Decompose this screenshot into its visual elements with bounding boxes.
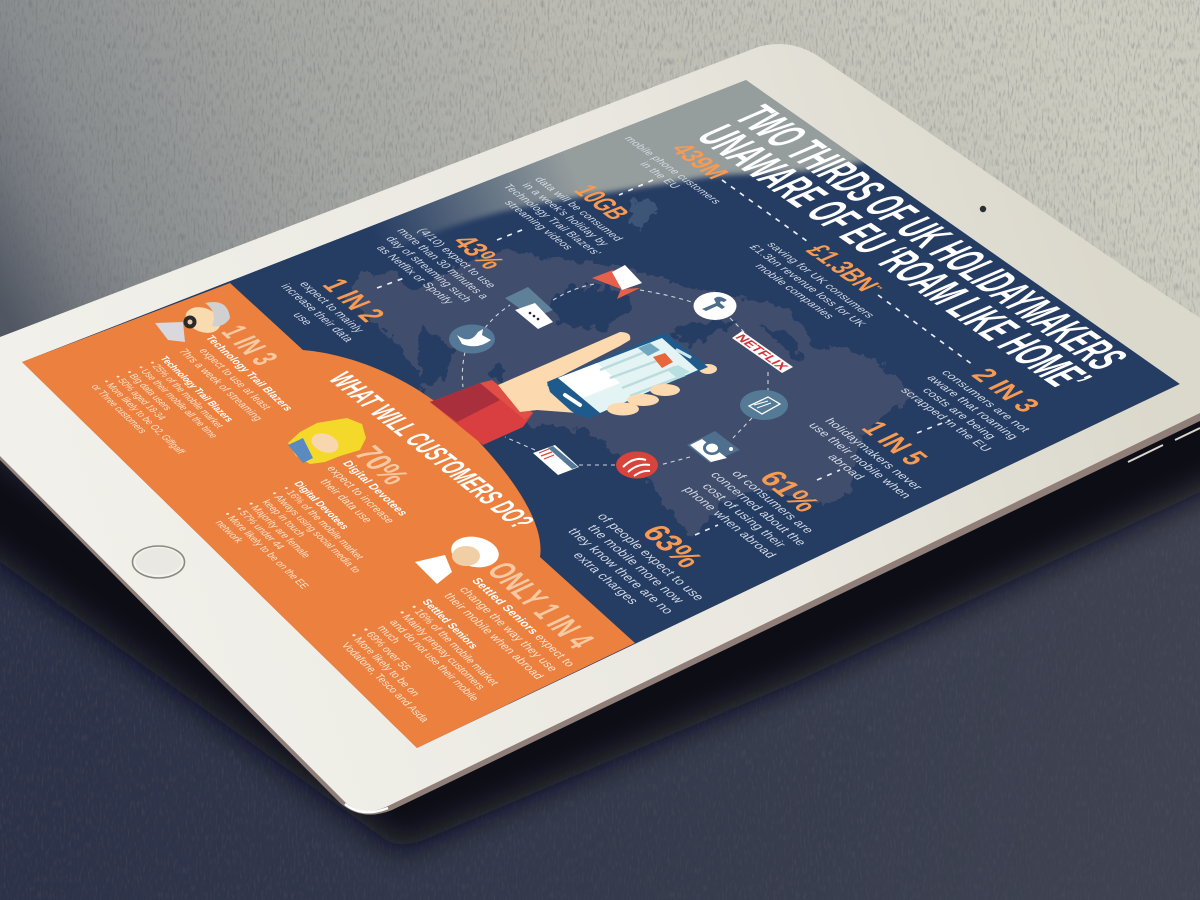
segment: settled seniors: Settled Seniors expect to <box>469 576 577 669</box>
stat: 1 in 2: expect to mainly <box>296 280 366 335</box>
stat: 10GB: Technology Trail Blazers' <box>500 183 604 257</box>
segment: settled seniors: their mobile when abroad <box>441 592 546 681</box>
segment: technology trail blazers: • More likely to be O2, Giffgaff <box>100 378 188 455</box>
dashed ring around the hand <box>462 284 768 465</box>
stat: 1 in 2: 1 IN 2 <box>314 275 392 326</box>
stat: 1 in 5 <box>792 414 934 507</box>
fingers <box>607 384 680 416</box>
segment: digital devotees: keep in touch <box>259 499 308 539</box>
hand holding phone <box>430 332 717 445</box>
stat: £1.3BN: £1.3BN <box>800 241 903 307</box>
stat: 63%: extra charges <box>570 550 643 606</box>
stat: 1 in 5: abroad <box>824 452 868 482</box>
stat: 61% <box>678 463 828 561</box>
segment: technology trail blazers: 1 IN 3 <box>213 321 285 370</box>
segment: settled seniors: much <box>374 624 402 645</box>
stat: 1 in 2: use <box>290 311 315 327</box>
stat: 10GB: 10GB <box>567 181 636 223</box>
segment: technology trail blazers <box>89 321 295 460</box>
map of Europe and Asia <box>345 198 915 560</box>
icon: twitter <box>449 324 495 354</box>
segment: settled seniors: • 16% of the mobile market <box>407 604 500 687</box>
stat: 63%: the mobile more now <box>584 523 689 606</box>
stat: 10GB: data will be consumed <box>531 176 625 243</box>
segment: digital devotees: Digital Devotees <box>339 459 410 518</box>
icon: instagram <box>687 431 740 463</box>
stat: 439M: 439M <box>664 140 736 182</box>
segment: technology trail blazers: • 50% aged 18-34 <box>112 374 168 421</box>
stat: 43%: 43% <box>445 231 512 273</box>
stat: 61%: cost of using their <box>699 482 789 550</box>
segment: settled seniors: and do not use their mobile <box>386 619 481 703</box>
segment: digital devotees: Digital Devotees <box>291 480 351 531</box>
segment: technology trail blazers: • Big data users <box>123 369 174 412</box>
dashed connectors between statistics <box>377 180 973 535</box>
segment: technology trail blazers: • 25% of the mobile market <box>146 360 226 430</box>
stat: 63%: of people expect to use <box>594 511 709 603</box>
stat: 2 in 3: scrapped in the EU <box>897 386 994 454</box>
avatar: digital devotee <box>288 418 366 464</box>
stat: 61%: concerned about the <box>707 470 810 548</box>
panel: navy screen <box>22 70 1180 748</box>
stat: £1.3BN: saving for UK consumers <box>764 241 877 320</box>
stat: £1.3BN: ** <box>872 284 886 291</box>
segment: technology trail blazers: 7hrs a week of streaming <box>176 348 265 423</box>
stat: 2 in 3: consumers are not <box>938 368 1033 434</box>
stat: 63% <box>549 511 712 624</box>
segment: settled seniors <box>334 557 603 726</box>
segment: digital devotees: • Majority are female <box>244 500 313 560</box>
stat: 2 in 3: aware that roaming <box>924 374 1021 441</box>
segment: digital devotees: • 16% of the mobile market <box>279 485 366 561</box>
stat: 439M: mobile phone customers <box>621 135 724 206</box>
stat: 10GB <box>487 172 636 262</box>
segment: digital devotees: • More likely to be on the EE <box>220 511 311 591</box>
icon: netflix: NETFLIX <box>732 333 792 372</box>
avatar: settled senior <box>415 533 501 584</box>
segment: digital devotees: 70% <box>346 441 417 489</box>
stat: £1.3BN: £1.3bn revenue loss for UK <box>746 243 869 329</box>
stat: 43%: more than 30 minutes a <box>393 227 492 301</box>
segment: digital devotees: • Always using social media to <box>267 490 363 575</box>
title <box>685 99 1140 396</box>
stat: 10GB: in a week's holiday by <box>519 182 612 248</box>
icon: spotify <box>616 452 658 478</box>
stat: 43%: as Netflix or Spotify <box>373 244 456 306</box>
avatar: technology trail blazer <box>155 302 230 342</box>
stat: 1 in 2: increase their data <box>277 282 356 344</box>
stat: 43%: day of streaming such <box>382 235 474 304</box>
stat: 1 in 5: 1 IN 5 <box>854 417 934 470</box>
stat: £1.3BN <box>733 238 891 334</box>
segment: settled seniors: • 69% over 55 <box>358 626 412 673</box>
stat: 2 in 3: costs are being <box>919 386 999 441</box>
segment: settled seniors: • More likely to be on <box>346 632 422 698</box>
stat: 43%: (4/10) expect to use <box>414 227 499 290</box>
stat: 10GB: streaming videos <box>501 199 576 251</box>
icon: side buttons <box>1128 428 1200 462</box>
tablet shadow <box>0 320 1200 850</box>
stat: £1.3BN: mobile companies <box>752 263 837 321</box>
segment: digital devotees: expect to increase <box>324 464 397 525</box>
panel: orange customers section <box>22 283 635 748</box>
segment: settled seniors: ONLY 1 IN 4 <box>479 557 603 653</box>
stat: 2 in 3: 2 IN 3 <box>964 364 1047 416</box>
segment: digital devotees: their data use <box>317 478 375 525</box>
icon: camera <box>980 206 986 212</box>
stat: 61%: 61% <box>751 466 828 516</box>
phone <box>547 333 708 418</box>
segment: technology trail blazers: • Use their mobile all the time <box>135 364 220 439</box>
hand <box>498 332 630 413</box>
icon: bank card <box>533 445 579 475</box>
segment: digital devotees: network <box>212 519 245 545</box>
stat: 439M: in the EU <box>637 160 683 190</box>
segment: settled seniors: Settled Seniors <box>419 598 480 651</box>
segment: settled seniors: change the way they use <box>456 585 560 674</box>
icon: document <box>740 390 788 420</box>
segment: technology trail blazers: Technology Trail Blazers <box>202 334 295 413</box>
stat: 1 in 5: holidaymakers never <box>822 416 926 492</box>
segment: digital devotees: • 57% under 44 <box>232 506 287 552</box>
stat: 2 in 3 <box>897 364 1047 454</box>
icon: chat <box>505 287 553 329</box>
heading: what will customers do: WHAT WILL CUSTOMERS DO? <box>321 368 541 533</box>
stat: 61%: phone when abroad <box>680 485 779 560</box>
icon: envelope <box>592 265 642 299</box>
icon: facebook <box>694 292 736 320</box>
stat: 63%: 63% <box>634 520 712 572</box>
sleeve <box>430 380 533 445</box>
stat: 63%: they know there are no <box>565 526 678 616</box>
stat: 1 in 2 <box>263 275 392 350</box>
segment: technology trail blazers: or Three customers <box>89 383 149 435</box>
segment: settled seniors: Vodafone, Tesco and Asda <box>338 641 431 724</box>
glare on screen <box>384 80 866 245</box>
segment: technology trail blazers: Technology Trail Blazers <box>158 355 236 423</box>
icon: home button <box>132 546 184 578</box>
stat: 61%: of consumers are <box>728 469 817 535</box>
segment: settled seniors: • Mainly prepay customers <box>395 609 487 692</box>
segment: technology trail blazers: expect to use at least <box>196 347 273 412</box>
segment: digital devotees <box>209 441 417 601</box>
stat: 1 in 5: use their mobile when <box>805 421 915 500</box>
stat: 43% <box>366 221 512 312</box>
